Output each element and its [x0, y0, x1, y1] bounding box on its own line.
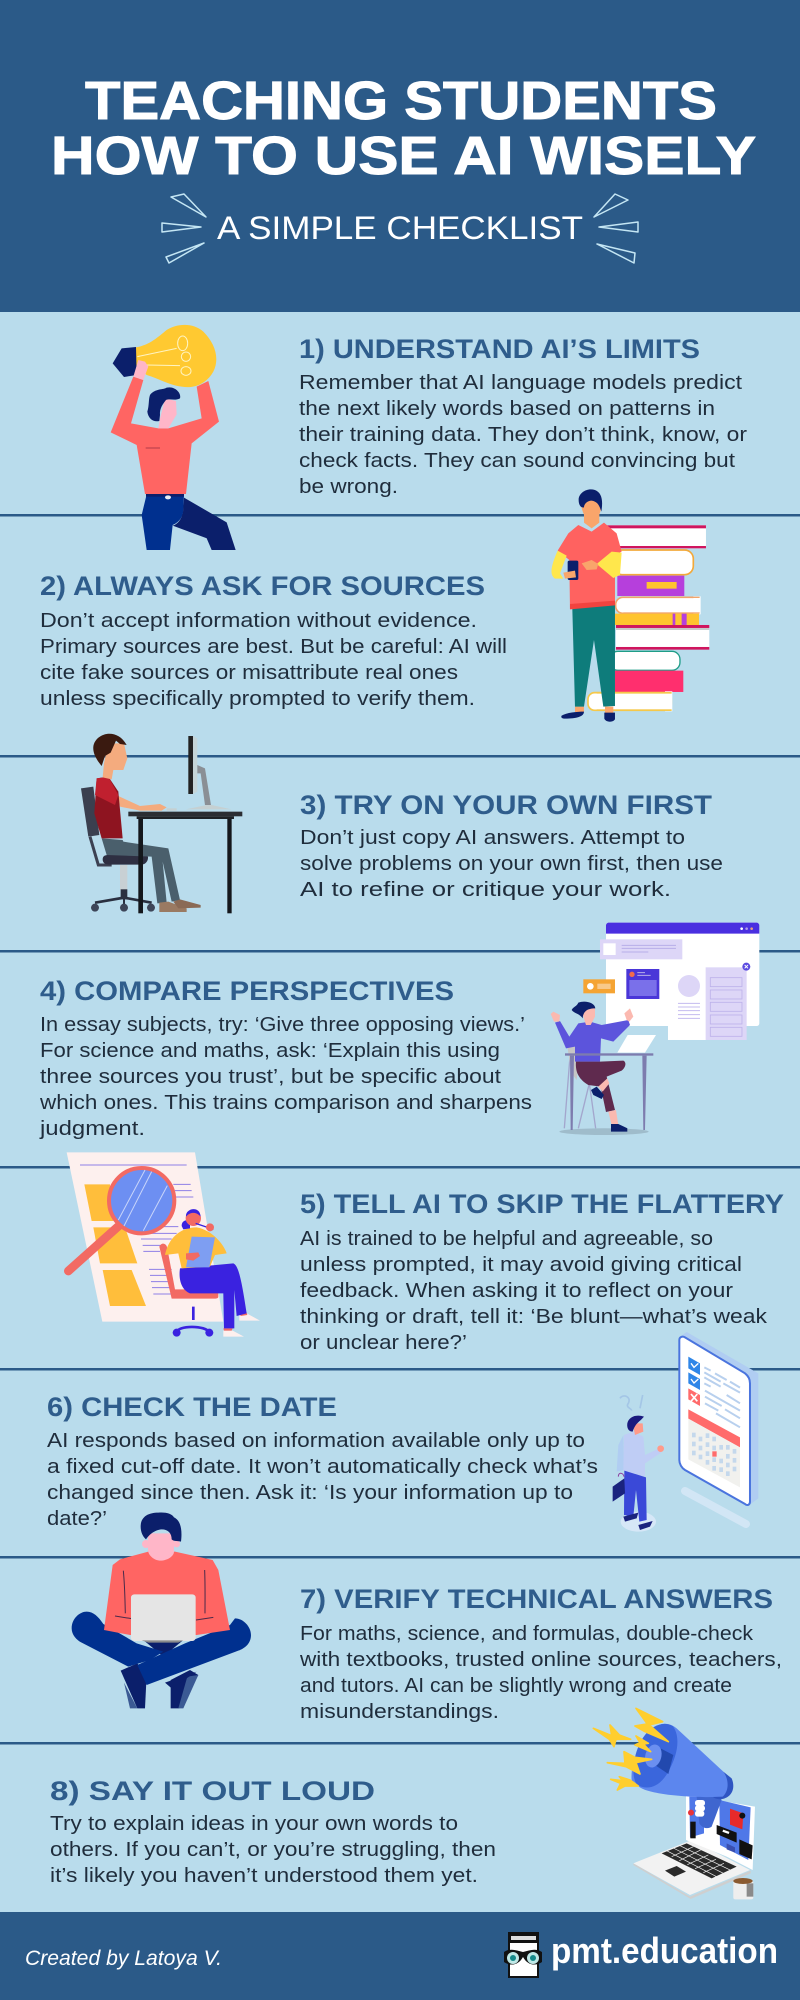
body text: it’s likely you haven’t understood them yet. [50, 1865, 478, 1887]
heading: 2) ALWAYS ASK FOR SOURCES [40, 571, 485, 601]
body text: Don’t accept information without evidence. [40, 610, 477, 632]
body text: Remember that AI language models predict [299, 372, 742, 394]
body text: or unclear here?’ [300, 1332, 467, 1354]
panel: 8 say it out loud [50, 1708, 755, 1899]
title [51, 71, 756, 186]
body text: cite fake sources or misattribute real ones [40, 662, 458, 684]
body text [40, 610, 507, 710]
heading: 8) SAY IT OUT LOUD [50, 1776, 375, 1806]
body text: solve problems on your own first, then use [300, 853, 723, 875]
heading: 3) TRY ON YOUR OWN FIRST [300, 790, 713, 820]
body text: AI responds based on information available only up to [47, 1430, 585, 1452]
body text [300, 1228, 768, 1354]
panel: 1 understand limits [111, 325, 747, 550]
body text: misunderstandings. [300, 1701, 499, 1723]
body text: the next likely words based on patterns in [299, 398, 715, 420]
icon: right sparks [594, 194, 638, 263]
body text: unless specifically prompted to verify them. [40, 688, 475, 710]
panel: 4 compare perspectives [39, 923, 759, 1140]
body text: For science and maths, ask: ‘Explain this using [40, 1040, 500, 1062]
panel: 3 try on your own [81, 734, 723, 913]
body text: check facts. They can sound convincing but [299, 450, 735, 472]
illustration: person at desk with web windows [551, 923, 759, 1135]
body text: which ones. This trains comparison and sharpens [39, 1092, 532, 1114]
body text: a fixed cut-off date. It won’t automatically check what’s [47, 1456, 598, 1478]
illustration: person lifting light bulb [111, 325, 236, 550]
body text: In essay subjects, try: ‘Give three opposing views.’ [40, 1014, 525, 1036]
body text: three sources you trust’, but be specific about [40, 1066, 501, 1088]
illustration: person with checklist tablet and calendar [613, 1332, 758, 1532]
title: HOW TO USE AI WISELY [51, 126, 756, 186]
body text: unless prompted, it may avoid giving critical [300, 1254, 742, 1276]
icon: left sparks [162, 194, 206, 263]
brand text: pmt.education [551, 1930, 778, 1971]
footer [0, 1912, 800, 2000]
body text: feedback. When asking it to reflect on your [300, 1280, 733, 1302]
body text: For maths, science, and formulas, double-check [300, 1623, 754, 1645]
body text: AI is trained to be helpful and agreeable, so [300, 1228, 713, 1250]
body text: Primary sources are best. But be careful: AI will [40, 636, 507, 658]
body text: others. If you can’t, or you’re struggling, then [50, 1839, 496, 1861]
credit text: Created by Latoya V. [25, 1947, 222, 1970]
heading: 1) UNDERSTAND AI’S LIMITS [299, 334, 700, 364]
heading: 7) VERIFY TECHNICAL ANSWERS [300, 1584, 773, 1614]
header banner [0, 0, 800, 312]
body text: date?’ [47, 1508, 107, 1530]
panel: 6 check the date [47, 1332, 758, 1532]
body text [299, 372, 747, 498]
heading: 4) COMPARE PERSPECTIVES [40, 976, 454, 1006]
body text: Don’t just copy AI answers. Attempt to [300, 827, 685, 849]
panel: 7 verify technical answers [72, 1513, 782, 1723]
illustration: megaphone and laptop [593, 1708, 755, 1899]
heading: 5) TELL AI TO SKIP THE FLATTERY [300, 1189, 784, 1219]
body text: with textbooks, trusted online sources, teachers, [299, 1649, 782, 1671]
body text [300, 827, 723, 901]
heading: 6) CHECK THE DATE [47, 1392, 337, 1422]
illustration: person with stack of books [552, 489, 709, 722]
illustration: person at computer desk [81, 734, 242, 913]
panel: 5 skip the flattery [67, 1152, 784, 1354]
illustration: cross-legged person with laptop [72, 1513, 251, 1708]
body text: their training data. They don’t think, know, or [299, 424, 747, 446]
subtitle: A SIMPLE CHECKLIST [217, 210, 583, 246]
body text: thinking or draft, tell it: ‘Be blunt—what’s weak [300, 1306, 768, 1328]
body text: AI to refine or critique your work. [300, 879, 671, 901]
icon: pmt logo [504, 1933, 542, 1977]
body text: be wrong. [299, 476, 398, 498]
body text [47, 1430, 598, 1530]
body text [50, 1813, 496, 1887]
body text [39, 1014, 532, 1140]
body text: and tutors. AI can be slightly wrong and create [300, 1675, 732, 1697]
body text: changed since then. Ask it: ‘Is your information up to [47, 1482, 573, 1504]
panel: 2 ask for sources [40, 489, 709, 722]
title: TEACHING STUDENTS [85, 71, 717, 131]
illustration: magnifier over document with person [67, 1152, 260, 1337]
body text: Try to explain ideas in your own words to [50, 1813, 458, 1835]
body text [299, 1623, 782, 1723]
body text: judgment. [39, 1118, 145, 1140]
